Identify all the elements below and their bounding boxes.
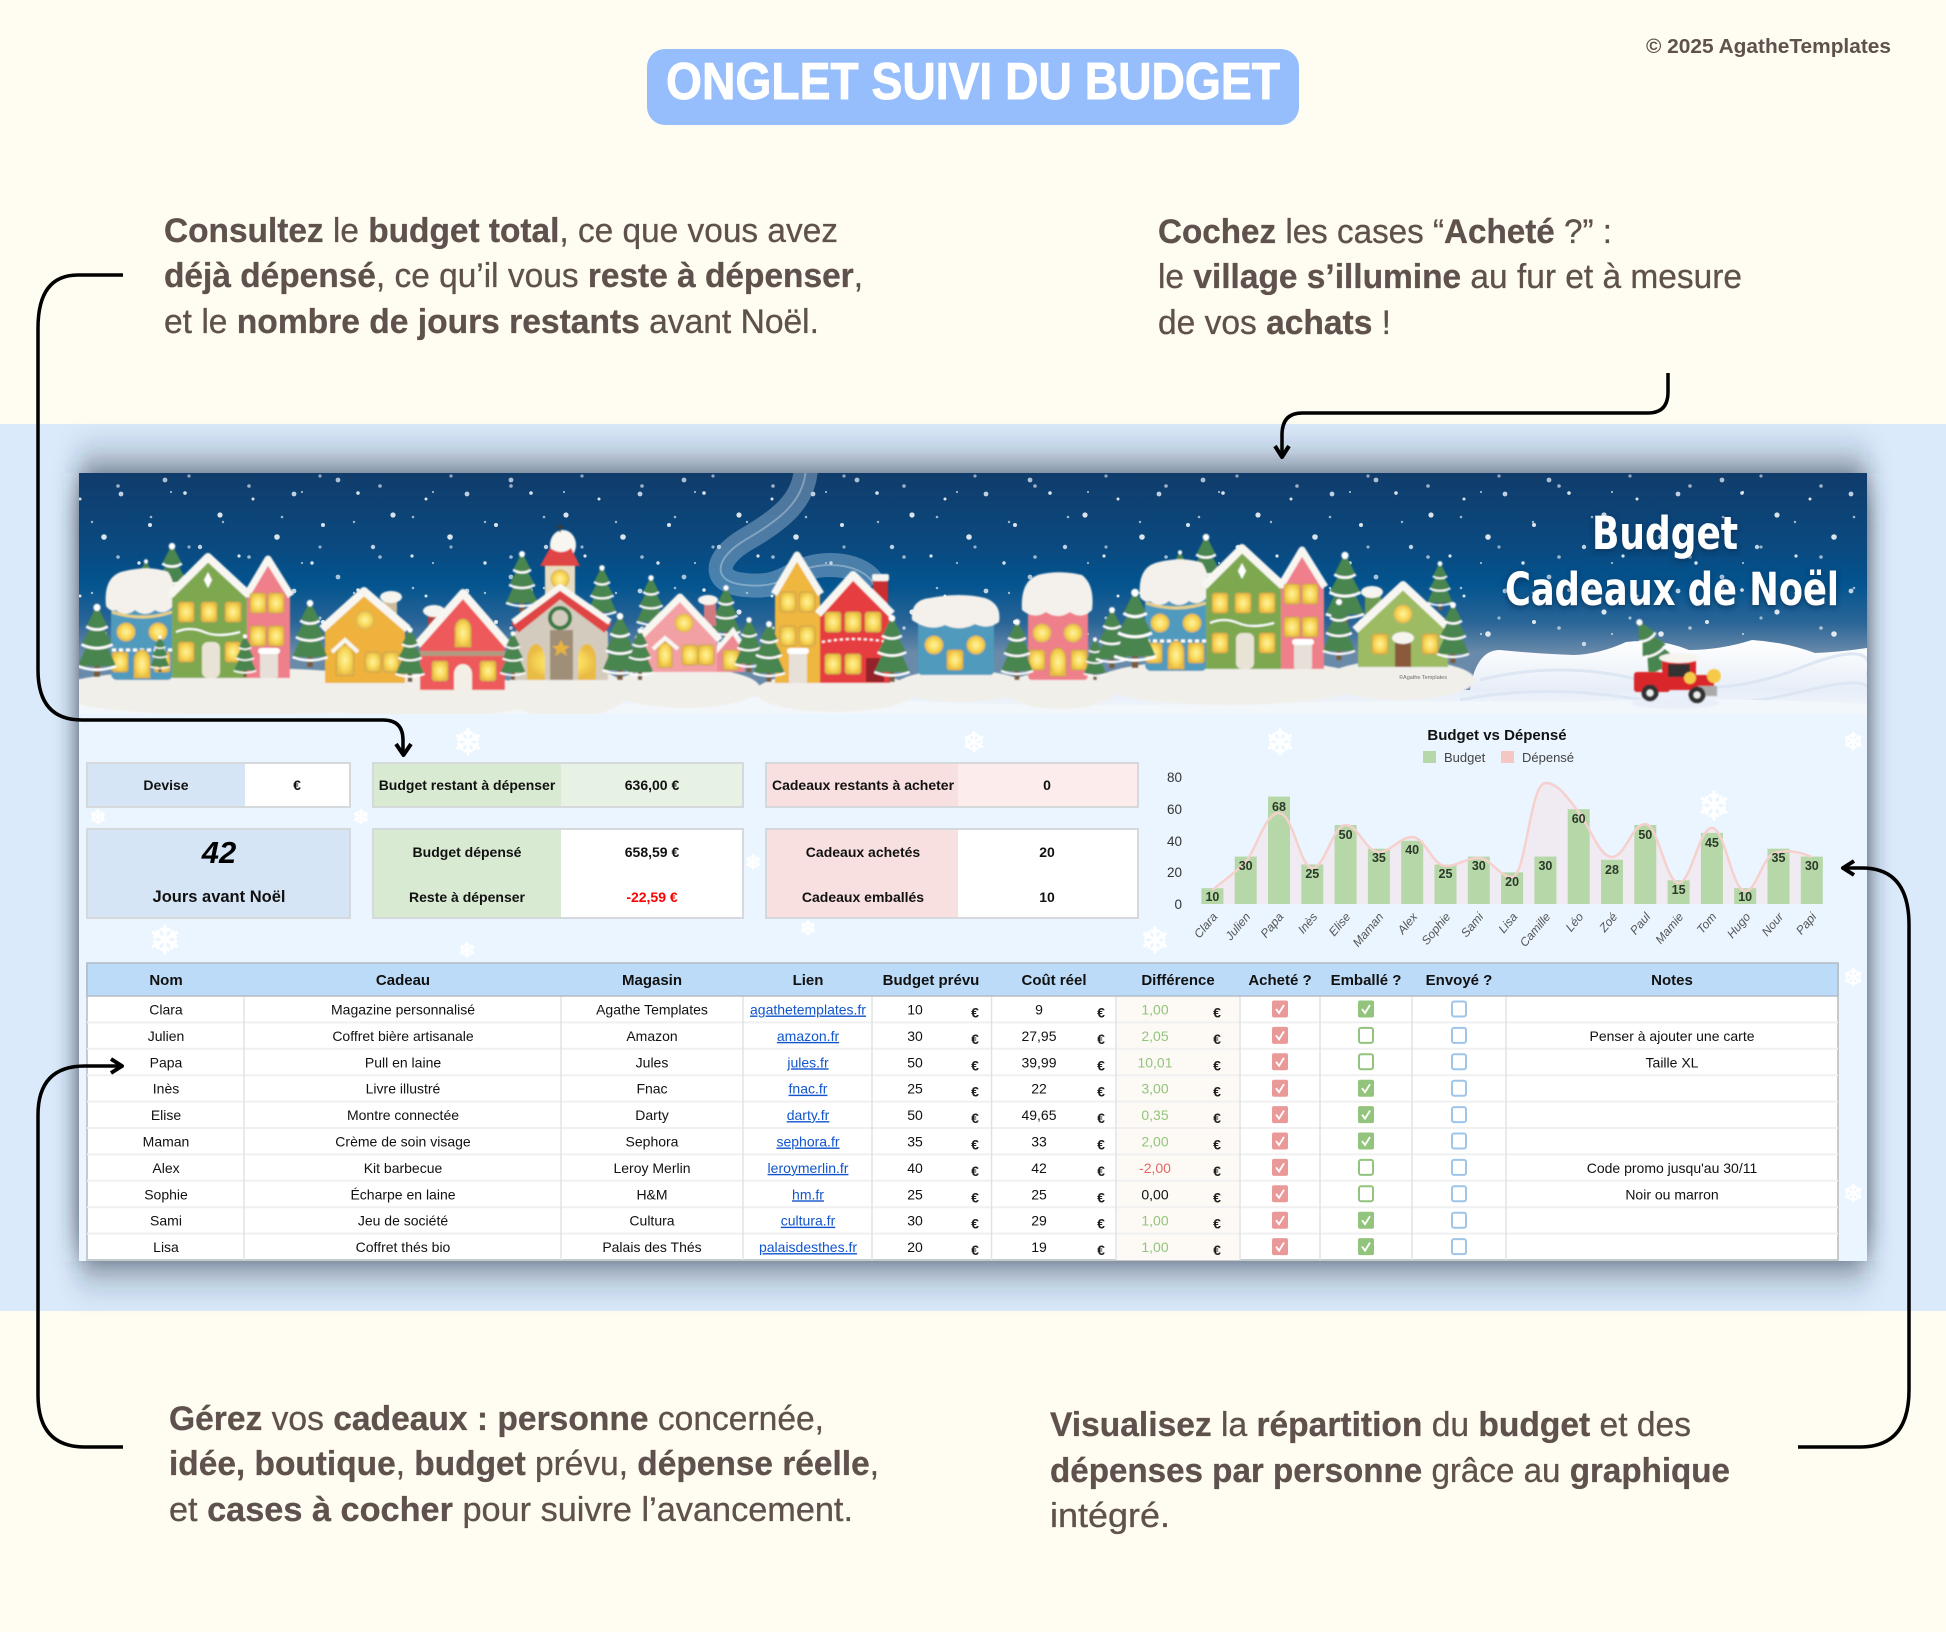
chimney smoke swirl — [721, 465, 874, 586]
x axis labels: Sami — [1458, 910, 1487, 940]
x axis labels — [1191, 909, 1820, 950]
spreadsheet shadow — [79, 473, 1867, 1261]
panel: spent and left: 658,59 € — [625, 844, 679, 860]
row: Julien: Amazon — [626, 1028, 678, 1044]
title — [647, 49, 1299, 125]
row: Inès: fnac.fr — [789, 1081, 828, 1097]
text block: chart explanation: intégré. — [1050, 1497, 1170, 1535]
table header: Acheté ? — [1248, 972, 1312, 989]
row: Sami — [150, 1212, 1466, 1232]
row: Lisa: Palais des Thés — [602, 1239, 702, 1255]
decorative snowflakes — [90, 723, 1863, 1208]
row: Maman: € — [1213, 1136, 1221, 1152]
x axis labels: Sophie — [1419, 910, 1454, 948]
row: Sophie: H&M — [636, 1186, 668, 1202]
panel: gifts bought and wrapped: 20 — [1039, 844, 1055, 860]
row: Sophie: 25 — [907, 1186, 923, 1202]
row: Julien: 2,05 — [1141, 1028, 1169, 1044]
snow mounds — [50, 659, 1475, 718]
x axis labels: Julien — [1222, 910, 1254, 944]
row: Sami: € — [1213, 1216, 1221, 1232]
chart legend: Budget — [1444, 750, 1486, 765]
table header: Coût réel — [1021, 972, 1087, 989]
decorative snowflakes: ❄ — [1843, 1180, 1863, 1208]
row: Maman: € — [1097, 1136, 1105, 1152]
text block: manage gifts: idée, boutique, budget prévu, dépense réelle, — [169, 1445, 879, 1483]
panel: spent and left: -22,59 € — [626, 889, 678, 905]
row: Lisa: Lisa — [153, 1239, 179, 1255]
text block: budget overview — [164, 212, 863, 341]
table header: Emballé ? — [1331, 972, 1401, 989]
chart: budget vs spent — [1167, 727, 1823, 950]
row: Sami: 1,00 — [1141, 1213, 1169, 1229]
y axis labels: 60 — [1167, 802, 1182, 817]
row: Papa: € — [971, 1057, 979, 1073]
text block: checkboxes light the village: le village s’illumine au fur et à mesure — [1158, 258, 1742, 296]
row: Papa: € — [1213, 1057, 1221, 1073]
row: Alex: Code promo jusqu'au 30/11 — [1587, 1160, 1757, 1176]
decorative snowflakes: ❄ — [459, 938, 475, 962]
row: Elise: € — [1213, 1110, 1221, 1126]
bar value labels: 68 — [1272, 800, 1286, 814]
row: Clara: Clara — [149, 1002, 183, 1018]
panel: gifts left to buy: 0 — [1043, 777, 1051, 793]
bar value labels: 40 — [1405, 843, 1419, 857]
row: Maman: Sephora — [626, 1134, 679, 1150]
row: Maman: 35 — [907, 1134, 923, 1150]
bar value labels: 50 — [1339, 828, 1353, 842]
row: Maman: 2,00 — [1141, 1134, 1169, 1150]
panel: gifts left to buy — [766, 763, 1138, 807]
house: pink — [637, 595, 747, 672]
row: Papa: Papa — [150, 1054, 183, 1070]
decorative snowflakes: ❄ — [1843, 964, 1863, 992]
row: Julien: 30 — [907, 1028, 923, 1044]
x axis labels: Camille — [1517, 910, 1554, 950]
decorative snowflakes: ❄ — [745, 850, 761, 874]
house: church — [513, 524, 610, 680]
decorative snowflakes: ❄ — [1697, 784, 1731, 830]
row: Inès: € — [971, 1084, 979, 1100]
row: Lisa: € — [971, 1242, 979, 1258]
house: blue snow roof — [912, 595, 999, 675]
text block: manage gifts — [169, 1400, 879, 1529]
decorative snowflakes: ❄ — [962, 726, 986, 759]
text block: checkboxes light the village: Cochez les cases “Acheté ?” : — [1158, 213, 1612, 251]
table header: Envoyé ? — [1426, 972, 1492, 989]
bar value labels: 10 — [1205, 890, 1219, 904]
bar value labels — [1205, 800, 1819, 904]
bar value labels: 20 — [1505, 875, 1519, 889]
row: Julien: amazon.fr — [777, 1028, 839, 1044]
arrow: text to village banner — [1275, 373, 1668, 457]
row: Lisa: Coffret thés bio — [356, 1239, 451, 1255]
copyright: © 2025 AgatheTemplates — [1646, 36, 1891, 58]
text block: budget overview: déjà dépensé, ce qu’il vous reste à dépenser, — [164, 257, 863, 295]
row: Lisa: palaisdesthes.fr — [759, 1239, 857, 1255]
row: Alex: 42 — [1031, 1160, 1047, 1176]
table header: Différence — [1141, 972, 1215, 989]
row: Clara: Agathe Templates — [596, 1002, 708, 1018]
text block: manage gifts: Gérez vos cadeaux : personne concernée, — [169, 1400, 824, 1438]
decorative snowflakes: ❄ — [1843, 728, 1863, 756]
table header: Notes — [1651, 972, 1693, 989]
x axis labels: Papa — [1258, 910, 1287, 940]
decorative snowflakes: ❄ — [1140, 921, 1170, 962]
row: Sophie: € — [1213, 1189, 1221, 1205]
bar value labels: 30 — [1805, 859, 1819, 873]
row: Sophie: Écharpe en laine — [350, 1186, 456, 1202]
row: Sophie: Noir ou marron — [1625, 1186, 1719, 1202]
row: Clara: € — [1213, 1004, 1221, 1020]
row: Alex: € — [1213, 1163, 1221, 1179]
row: Inès: Fnac — [636, 1081, 668, 1097]
house: red — [417, 592, 508, 690]
x axis labels: Tom — [1694, 910, 1719, 936]
chart title: Budget vs Dépensé — [1427, 727, 1567, 744]
y axis labels — [1167, 770, 1182, 912]
house: yellow — [322, 590, 408, 683]
bar value labels: 60 — [1572, 812, 1586, 826]
table header: Nom — [149, 972, 183, 989]
row: Papa: € — [1097, 1057, 1105, 1073]
decorative snowflakes: ❄ — [1265, 723, 1295, 764]
row: Clara: 9 — [1035, 1002, 1043, 1018]
decorative snowflakes: ❄ — [800, 916, 816, 940]
row: Maman — [143, 1132, 1466, 1152]
row: Papa: 50 — [907, 1054, 923, 1070]
panel: gifts bought and wrapped: Cadeaux emballés — [802, 889, 924, 905]
row: Inès: € — [1097, 1084, 1105, 1100]
title: ONGLET SUIVI DU BUDGET — [666, 53, 1280, 111]
row: Sophie: hm.fr — [792, 1186, 824, 1202]
table header: Budget prévu — [883, 972, 979, 989]
text block: chart explanation — [1050, 1406, 1730, 1535]
panel: gifts bought and wrapped: 10 — [1039, 889, 1055, 905]
row: Julien: 27,95 — [1021, 1028, 1057, 1044]
row: Papa: jules.fr — [786, 1054, 829, 1070]
row: Alex: Leroy Merlin — [613, 1160, 691, 1176]
panel: remaining budget: Budget restant à dépenser — [379, 777, 556, 793]
text block: budget overview: et le nombre de jours restants avant Noël. — [164, 303, 819, 341]
row: Julien: € — [1097, 1031, 1105, 1047]
trees behind houses — [135, 534, 1453, 640]
row: Inès: 3,00 — [1141, 1081, 1169, 1097]
bar value labels: 28 — [1605, 863, 1619, 877]
row: Sami: Jeu de société — [358, 1213, 448, 1229]
row: Lisa: € — [1213, 1242, 1221, 1258]
y axis labels: 80 — [1167, 770, 1182, 785]
panel: days before Christmas — [87, 829, 350, 918]
house: yellow narrow — [774, 554, 821, 683]
panel: spreadsheet — [50, 465, 1869, 1261]
watermark: ©Agathe Templates — [1399, 674, 1447, 681]
x axis labels: Hugo — [1724, 910, 1754, 941]
row: Sami: € — [1097, 1216, 1105, 1232]
row: Julien — [148, 1027, 1755, 1047]
blue background band — [0, 424, 1946, 1311]
row: Sami: 29 — [1031, 1213, 1047, 1229]
budget bars — [1201, 797, 1823, 904]
x axis labels: Paul — [1627, 910, 1654, 937]
row: Alex: € — [971, 1163, 979, 1179]
bar value labels: 30 — [1472, 859, 1486, 873]
row: Alex: 40 — [907, 1160, 923, 1176]
panel: days before Christmas: Jours avant Noël — [153, 888, 285, 906]
x axis labels: Inès — [1295, 910, 1320, 936]
bar value labels: 10 — [1738, 890, 1752, 904]
banner: night sky and village — [50, 465, 1869, 718]
x axis labels: Clara — [1191, 910, 1221, 941]
x axis labels: Léo — [1563, 910, 1587, 934]
decorative snowflakes: ❄ — [453, 723, 483, 764]
decorative snowflakes: ❄ — [90, 805, 106, 829]
row: Elise: € — [1097, 1110, 1105, 1126]
row: Inès: € — [1213, 1084, 1221, 1100]
row: Inès: Livre illustré — [366, 1081, 441, 1097]
row: Maman: Crème de soin visage — [335, 1134, 471, 1150]
row: Clara: 10 — [907, 1002, 923, 1018]
chart legend — [1423, 750, 1574, 765]
panel: currency — [87, 763, 350, 807]
row: Lisa — [153, 1238, 1466, 1258]
text block: checkboxes light the village — [1158, 213, 1742, 342]
bar value labels: 35 — [1372, 851, 1386, 865]
row: Papa: Taille XL — [1646, 1054, 1699, 1070]
row: Sophie: 0,00 — [1141, 1186, 1169, 1202]
row: Papa — [150, 1053, 1699, 1073]
row: Julien: € — [971, 1031, 979, 1047]
row: Elise: Elise — [151, 1107, 181, 1123]
spent area — [1212, 783, 1812, 904]
text block: chart explanation: dépenses par personne grâce au graphique — [1050, 1452, 1730, 1490]
row: Sophie — [144, 1185, 1719, 1205]
spent line — [1212, 783, 1812, 891]
row: Papa: Jules — [636, 1054, 668, 1070]
bar value labels: 15 — [1672, 883, 1686, 897]
panel: remaining budget — [373, 763, 743, 807]
table header: Cadeau — [376, 972, 430, 989]
table header: Lien — [793, 972, 823, 989]
bar value labels: 25 — [1305, 867, 1319, 881]
house: pink tower — [1022, 572, 1093, 680]
row: Inès — [153, 1080, 1466, 1100]
row: Alex: Alex — [152, 1160, 180, 1176]
row: Clara — [149, 1000, 1466, 1020]
row: Clara: € — [1097, 1004, 1105, 1020]
row: Clara: € — [971, 1004, 979, 1020]
panel: spent and left: Reste à dépenser — [409, 889, 526, 905]
snowy hills — [1457, 640, 1867, 692]
bar value labels: 30 — [1538, 859, 1552, 873]
table header: Magasin — [622, 972, 682, 989]
bar value labels: 50 — [1638, 828, 1652, 842]
row: Sophie: € — [971, 1189, 979, 1205]
text block: checkboxes light the village: de vos achats ! — [1158, 304, 1391, 342]
panel: currency: € — [293, 777, 301, 793]
x axis labels: Papi — [1793, 910, 1820, 937]
x axis labels: Nour — [1759, 909, 1787, 939]
row: Alex: Kit barbecue — [364, 1160, 443, 1176]
row: Maman: Maman — [143, 1134, 189, 1150]
row: Lisa: € — [1097, 1242, 1105, 1258]
row: Maman: € — [971, 1136, 979, 1152]
arrow: text to remaining budget — [38, 275, 411, 755]
text block: chart explanation: Visualisez la répartition du budget et des — [1050, 1406, 1691, 1444]
panel: gifts left to buy: Cadeaux restants à acheter — [772, 777, 955, 793]
bar value labels: 25 — [1439, 867, 1452, 881]
row: Alex: -2,00 — [1139, 1160, 1171, 1176]
row: Julien: Coffret bière artisanale — [332, 1028, 474, 1044]
row: Clara: Magazine personnalisé — [331, 1002, 475, 1018]
panel: spent and left: Budget dépensé — [413, 844, 522, 860]
row: Elise: Montre connectée — [347, 1107, 459, 1123]
row: Lisa: 1,00 — [1141, 1239, 1169, 1255]
panel: remaining budget: 636,00 € — [625, 777, 679, 793]
row: Elise: darty.fr — [787, 1107, 830, 1123]
x axis labels: Mamie — [1652, 910, 1687, 947]
house: red narrow — [818, 574, 892, 683]
row: Elise — [151, 1106, 1466, 1126]
trees in front of houses — [78, 589, 1469, 682]
panel: days before Christmas: 42 — [201, 835, 236, 870]
row: Julien: € — [1213, 1031, 1221, 1047]
row: Elise: 50 — [907, 1107, 923, 1123]
decorative snowflakes: ❄ — [148, 918, 182, 964]
row: Lisa: 19 — [1031, 1239, 1047, 1255]
y axis labels: 40 — [1167, 834, 1182, 849]
row: Sami: cultura.fr — [781, 1213, 836, 1229]
panel: gifts bought and wrapped — [766, 829, 1138, 918]
chart legend: Dépensé — [1522, 750, 1574, 765]
row: Sophie: Sophie — [144, 1186, 188, 1202]
panel: currency: Devise — [143, 777, 189, 793]
house group: blue, green and pink (left) — [106, 556, 291, 680]
row: Elise: 49,65 — [1021, 1107, 1057, 1123]
row: Inès: 22 — [1031, 1081, 1047, 1097]
banner title: Budget — [1592, 507, 1738, 560]
row: Sami: Sami — [150, 1213, 182, 1229]
row: Alex — [152, 1159, 1757, 1179]
row: Maman: 33 — [1031, 1134, 1047, 1150]
row: Inès: 25 — [907, 1081, 923, 1097]
row: Papa: Pull en laine — [365, 1054, 441, 1070]
row: Sophie: € — [1097, 1189, 1105, 1205]
row: Papa: 10,01 — [1137, 1054, 1173, 1070]
table: gift list — [87, 963, 1838, 1260]
arrow: text to chart — [1798, 861, 1909, 1447]
x axis labels: Zoé — [1596, 910, 1621, 936]
row: Elise: 0,35 — [1141, 1107, 1169, 1123]
banner title: Cadeaux de Noël — [1505, 563, 1839, 616]
row: Lisa: 20 — [907, 1239, 923, 1255]
row: Sami: € — [971, 1216, 979, 1232]
row: Julien: Penser à ajouter une carte — [1590, 1028, 1755, 1044]
row: Alex: leroymerlin.fr — [768, 1160, 849, 1176]
bar value labels: 30 — [1239, 859, 1253, 873]
row: Maman: sephora.fr — [776, 1134, 840, 1150]
icon: red truck with Christmas tree — [1632, 618, 1721, 708]
x axis labels: Elise — [1326, 910, 1354, 939]
x axis labels: Maman — [1350, 910, 1387, 950]
row: Papa: 39,99 — [1021, 1054, 1057, 1070]
x axis labels: Lisa — [1495, 910, 1521, 936]
bar value labels: 35 — [1772, 851, 1785, 865]
house: green — [1355, 584, 1451, 667]
village illustration — [50, 524, 1721, 718]
text block: budget overview: Consultez le budget total, ce que vous avez — [164, 212, 838, 250]
panel: gifts bought and wrapped: Cadeaux achetés — [806, 844, 920, 860]
x axis labels: Alex — [1394, 909, 1421, 938]
row: Julien: Julien — [148, 1028, 184, 1044]
row: Elise: € — [971, 1110, 979, 1126]
decorative snowflakes: ❄ — [353, 805, 369, 829]
house group: blue, green and pink (right) — [1140, 547, 1325, 671]
row: Clara: agathetemplates.fr — [750, 1002, 866, 1018]
row: Clara: 1,00 — [1141, 1002, 1169, 1018]
row: Elise: Darty — [635, 1107, 669, 1123]
row: Sami: Cultura — [629, 1213, 675, 1229]
row: Sophie: 25 — [1031, 1186, 1047, 1202]
table header — [87, 963, 1838, 996]
panel: spent and left — [373, 829, 743, 918]
row: Inès: Inès — [153, 1081, 179, 1097]
y axis labels: 20 — [1167, 865, 1182, 880]
row: Alex: € — [1097, 1163, 1105, 1179]
arrow: text to gift table — [38, 1059, 123, 1447]
banner title — [1505, 507, 1839, 616]
row: Sami: 30 — [907, 1213, 923, 1229]
y axis labels: 0 — [1174, 897, 1182, 912]
text block: manage gifts: et cases à cocher pour suivre l’avancement. — [169, 1491, 853, 1529]
bar value labels: 45 — [1705, 836, 1719, 850]
